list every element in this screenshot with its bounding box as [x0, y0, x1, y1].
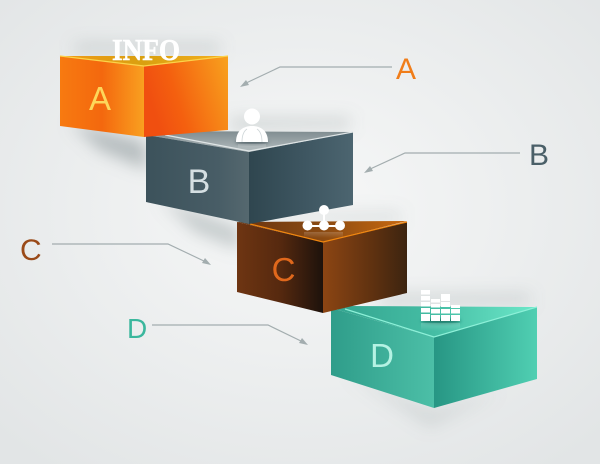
letter B: B [188, 163, 210, 201]
left face D [331, 308, 434, 408]
leader line C [52, 244, 206, 262]
box B [146, 131, 353, 224]
arrow head B [364, 166, 373, 173]
right face C [323, 222, 407, 313]
leader line D [152, 325, 303, 342]
icon: bars [421, 290, 461, 331]
icon: person [235, 108, 269, 150]
label A: A [396, 53, 416, 86]
right face A [144, 56, 228, 137]
left face A [60, 56, 144, 137]
letter A: A [89, 80, 111, 117]
left face B [146, 135, 249, 224]
icon: network nodes [302, 205, 345, 238]
label C: C [20, 234, 42, 267]
label D: D [127, 313, 147, 344]
top face D [331, 306, 537, 337]
callout D [127, 313, 308, 345]
box shadows [70, 44, 530, 428]
label B: B [529, 139, 549, 172]
letter D: D [370, 337, 394, 374]
box C [237, 221, 407, 313]
arrow head C [202, 258, 211, 265]
box D [331, 306, 537, 408]
arrow head A [240, 80, 249, 87]
top face B [146, 131, 353, 152]
box A [60, 56, 228, 137]
leader line B [368, 153, 520, 170]
letter C: C [272, 251, 295, 288]
callout B [364, 139, 549, 173]
right face B [249, 132, 353, 224]
callout A [240, 53, 416, 87]
callout C [20, 234, 211, 267]
leader line A [244, 67, 392, 84]
title: INFO: INFO [112, 32, 180, 67]
top face C [237, 221, 407, 242]
arrow head D [299, 338, 308, 345]
left face C [237, 222, 323, 313]
top face A [60, 56, 228, 66]
right face D [434, 307, 537, 408]
